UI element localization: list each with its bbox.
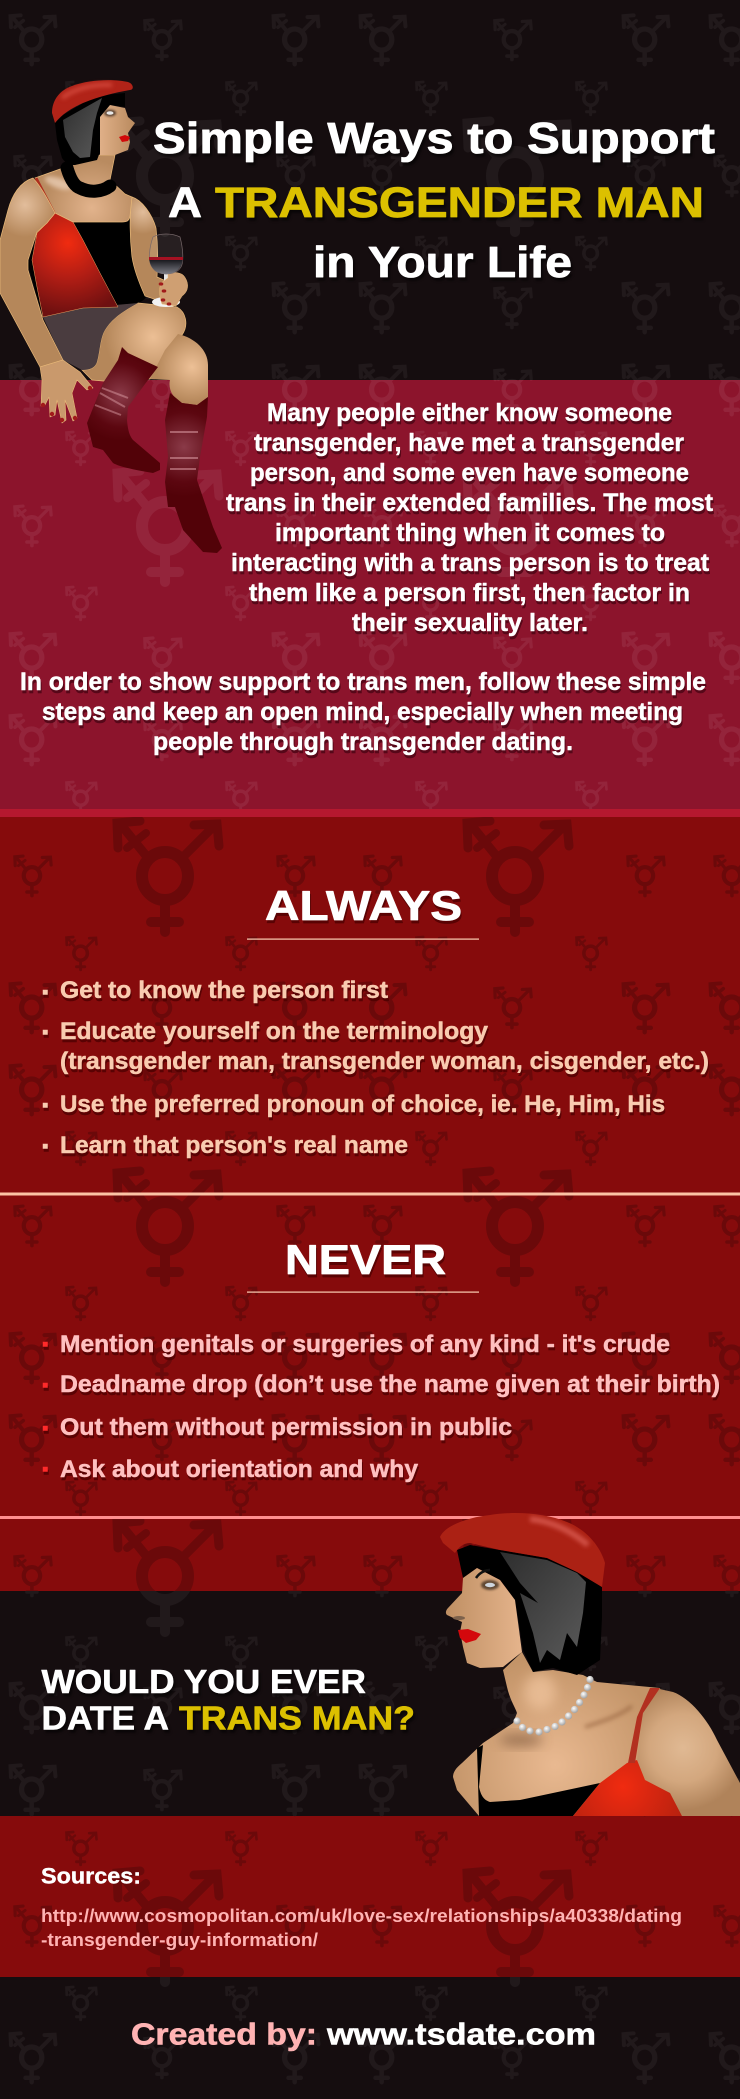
always list: Get to know the person first <box>60 977 388 1004</box>
always list: Learn that person's real name <box>60 1132 408 1159</box>
intro paragraph: interacting with a trans person is to treat <box>231 549 710 577</box>
throat shadow <box>499 1734 543 1746</box>
neck highlight <box>524 1674 556 1710</box>
finger nails <box>41 386 92 422</box>
title <box>153 114 715 287</box>
always list: (transgender man, transgender woman, cisgender, etc.) <box>60 1048 709 1075</box>
beret <box>440 1513 605 1587</box>
never list: Deadname drop (don’t use the name given at their birth) <box>60 1371 720 1398</box>
chest highlight <box>43 174 73 192</box>
face <box>100 105 135 155</box>
sources section background <box>0 1816 740 1977</box>
intro paragraph: steps and keep an open mind, especially when meeting <box>42 698 683 726</box>
torso and neck <box>453 1652 685 1816</box>
eye <box>104 110 116 116</box>
never list: Mention genitals or surgeries of any kind - it's crude <box>60 1331 670 1358</box>
intro paragraph: them like a person first, then factor in <box>249 579 690 607</box>
far arm <box>130 197 175 300</box>
lips <box>119 135 130 142</box>
intro section background <box>0 380 740 809</box>
wine glass stem <box>164 272 168 298</box>
rear boot <box>87 347 160 473</box>
front boot <box>165 393 222 553</box>
intro paragraph: In order to show support to trans men, follow these simple <box>20 668 706 696</box>
hair <box>55 93 125 165</box>
red top <box>573 1760 682 1816</box>
always list: Educate yourself on the terminology <box>60 1018 489 1045</box>
red strap <box>628 1688 660 1763</box>
sources label: Sources: <box>41 1864 141 1888</box>
face <box>446 1568 522 1668</box>
source url: -transgender-guy-information/ <box>41 1929 318 1950</box>
intro paragraph: Many people either know someone <box>267 399 672 427</box>
intro paragraph: people through transgender dating. <box>153 728 573 756</box>
footer credit: www.tsdate.com <box>326 2016 596 2052</box>
hair <box>457 1545 602 1675</box>
skirt <box>43 303 138 370</box>
footer credit <box>131 2016 596 2052</box>
never underline <box>247 1292 479 1293</box>
never list: Ask about orientation and why <box>60 1456 419 1483</box>
black top <box>477 1745 600 1816</box>
never list <box>43 1331 720 1483</box>
footer section background <box>0 1977 740 2099</box>
intro paragraph <box>20 399 714 756</box>
intro paragraph: trans in their extended families. The most <box>226 489 714 517</box>
title: A <box>168 179 202 227</box>
eye <box>481 1580 499 1590</box>
question section background <box>0 1591 740 1816</box>
near arm <box>0 178 63 367</box>
red strap <box>36 178 54 213</box>
header section background <box>0 0 740 380</box>
black top <box>28 197 146 318</box>
grey hair highlight <box>63 98 102 158</box>
intro paragraph: transgender, have met a transgender <box>254 429 684 457</box>
wine <box>149 258 183 274</box>
glass nails <box>159 282 171 306</box>
footer credit: Created by: <box>131 2016 317 2052</box>
always underline <box>247 938 479 940</box>
always list: Use the preferred pronoun of choice, ie. He, Him, His <box>60 1091 665 1118</box>
divider line between never and question <box>0 1516 740 1519</box>
question heading: DATE A <box>42 1700 169 1736</box>
chest <box>35 155 132 222</box>
illustration: portrait with beret and pearls <box>440 1513 740 1816</box>
divider band <box>0 809 740 817</box>
illustration: seated figure with wine glass <box>0 80 222 553</box>
lips <box>458 1629 481 1643</box>
front boot stripes <box>170 432 198 469</box>
pearl necklace <box>513 1676 594 1736</box>
red top <box>32 213 118 317</box>
rear boot stripes <box>95 388 128 415</box>
heading: never: NEVER <box>285 1236 446 1283</box>
title: in Your Life <box>313 238 572 287</box>
source url: http://www.cosmopolitan.com/uk/love-sex/relationships/a40338/dating <box>41 1905 682 1926</box>
question heading: TRANS MAN? <box>179 1700 415 1736</box>
question heading: WOULD YOU EVER <box>42 1663 366 1700</box>
collarbone shadow <box>585 1706 632 1727</box>
intro paragraph: their sexuality later. <box>352 609 588 637</box>
wine glass base <box>152 297 180 307</box>
hand around glass <box>160 272 188 306</box>
wine glass bowl <box>149 234 183 274</box>
question heading <box>42 1663 415 1736</box>
heading: always: ALWAYS <box>265 882 462 929</box>
collar <box>67 168 110 191</box>
intro paragraph: important thing when it comes to <box>275 519 665 547</box>
source url <box>41 1905 682 1950</box>
intro paragraph: person, and some even have someone <box>250 459 689 487</box>
divider line between always and never <box>0 1192 740 1196</box>
title: TRANSGENDER MAN <box>215 179 704 227</box>
never list: Out them without permission in public <box>60 1414 512 1441</box>
nostril <box>453 1616 465 1620</box>
always list <box>43 977 709 1159</box>
eyebrow <box>476 1570 490 1578</box>
shoulder and arm <box>637 1688 740 1816</box>
beret <box>52 80 133 123</box>
beret highlight <box>530 1519 588 1545</box>
beret highlight <box>62 85 112 98</box>
title: Simple Ways to Support <box>153 114 715 163</box>
lower leg <box>150 334 208 405</box>
hand on seat <box>40 360 93 423</box>
grey hair highlight <box>500 1552 586 1663</box>
always and never section background <box>0 817 740 1591</box>
upper thigh and knee <box>82 303 186 381</box>
